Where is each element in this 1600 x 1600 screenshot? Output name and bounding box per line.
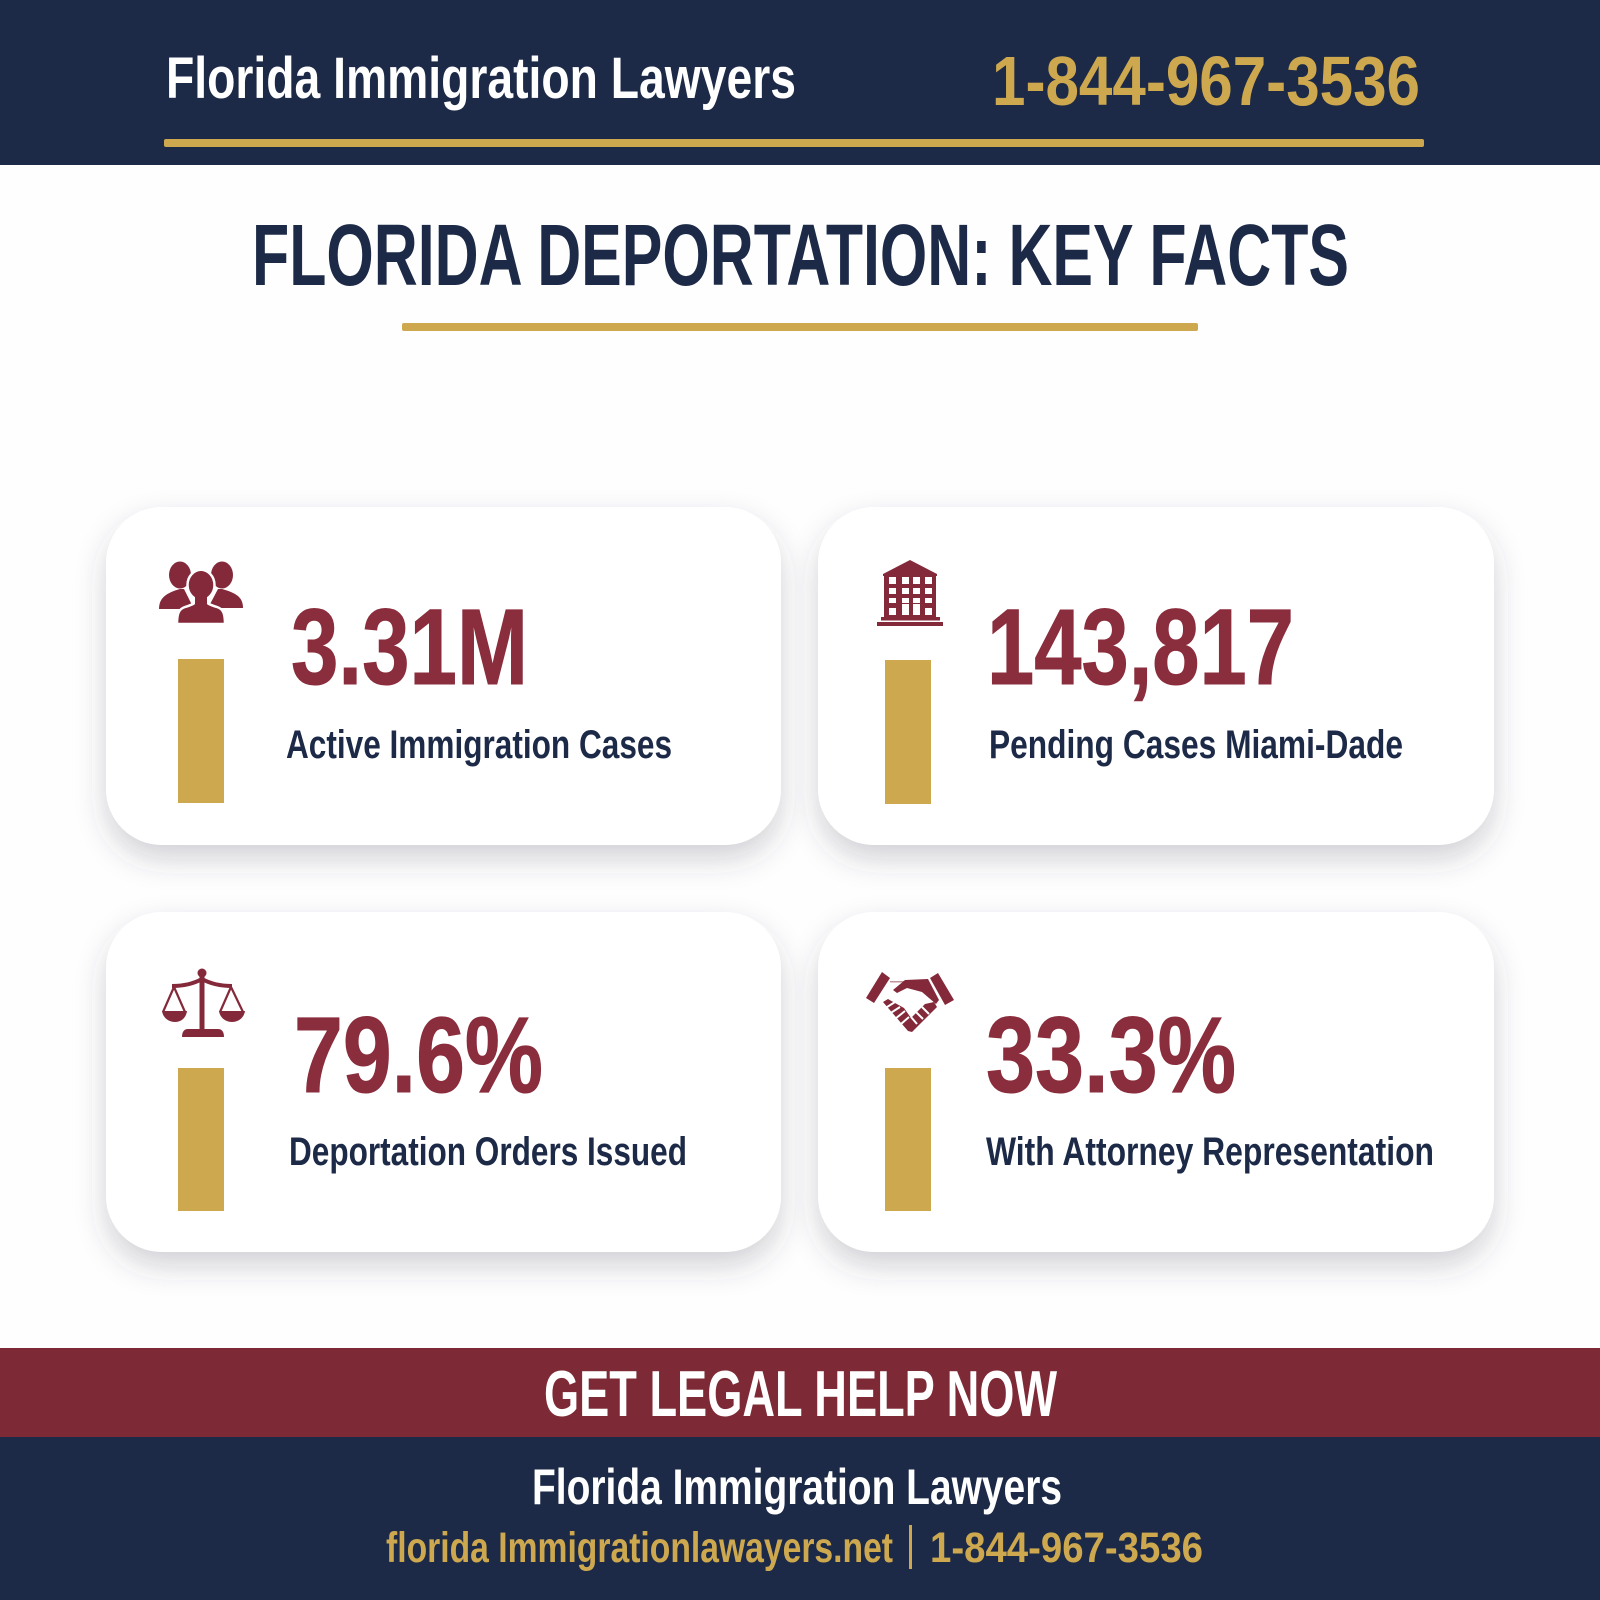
- call to action text: GET LEGAL HELP NOW: [544, 1357, 1057, 1430]
- footer phone number: 1-844-967-3536: [930, 1524, 1203, 1572]
- panel: deportation orders issued: [106, 912, 781, 1252]
- stat label: Pending Cases Miami-Dade: [989, 723, 1403, 767]
- accent bar: [178, 659, 224, 803]
- header phone number: 1-844-967-3536: [992, 42, 1420, 120]
- accent bar: [885, 1068, 931, 1211]
- panel: with attorney representation: [818, 912, 1494, 1252]
- stat value: 79.6%: [294, 994, 543, 1115]
- stat value: 143,817: [987, 586, 1294, 707]
- panel: pending cases miami-dade: [818, 507, 1494, 845]
- title underline: [402, 323, 1198, 331]
- footer firm name: Florida Immigration Lawyers: [532, 1459, 1062, 1515]
- accent bar: [178, 1068, 224, 1211]
- header firm name: Florida Immigration Lawyers: [166, 46, 796, 111]
- footer band: [0, 1437, 1600, 1600]
- panel: active immigration cases: [106, 507, 781, 845]
- icon: scales of justice: [162, 968, 245, 1037]
- stat value: 3.31M: [291, 586, 528, 707]
- icon: people: [159, 562, 243, 624]
- accent bar: [885, 660, 931, 804]
- call to action band: [0, 1348, 1600, 1438]
- stat value: 33.3%: [986, 994, 1236, 1115]
- icon: handshake: [866, 972, 954, 1032]
- stat label: Deportation Orders Issued: [289, 1130, 687, 1174]
- header gold rule: [164, 139, 1424, 147]
- header band: [0, 0, 1600, 165]
- stat label: With Attorney Representation: [986, 1130, 1434, 1174]
- footer website: florida Immigrationlawayers.net: [386, 1524, 893, 1572]
- footer separator: [909, 1525, 912, 1569]
- icon: building: [877, 560, 943, 626]
- stat label: Active Immigration Cases: [286, 723, 672, 767]
